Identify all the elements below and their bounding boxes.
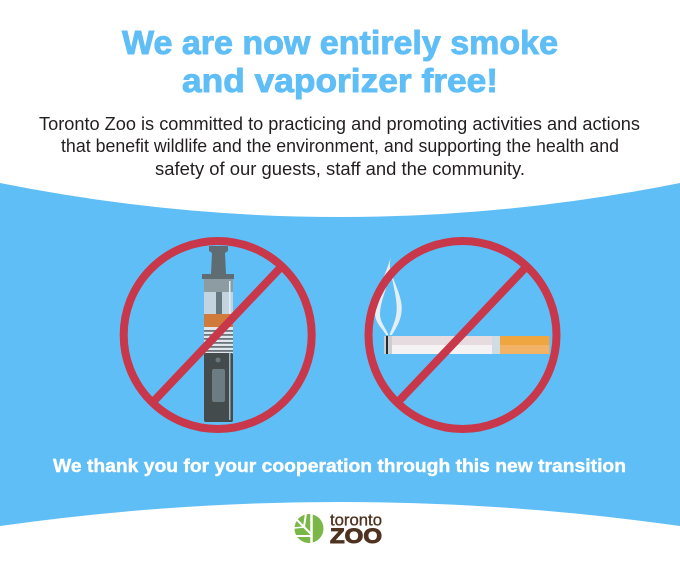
title xyxy=(122,24,558,99)
intro text block: safety of our guests, staff and the community. xyxy=(155,159,525,179)
intro text block: Toronto Zoo is committed to practicing and promoting activities and actions xyxy=(39,114,640,134)
intro text block xyxy=(39,114,640,179)
cigarette paper xyxy=(384,336,492,354)
logo leaf mark xyxy=(294,513,324,544)
cigarette band xyxy=(492,336,500,354)
smoke xyxy=(375,257,402,335)
vape mouthpiece xyxy=(209,246,228,274)
cigarette tip xyxy=(384,336,392,354)
vape orange band xyxy=(204,314,233,327)
blue curved band xyxy=(0,183,680,526)
vape battery body xyxy=(204,353,233,422)
title: and vaporizer free! xyxy=(182,62,498,99)
prohibition ring xyxy=(368,241,556,429)
icon: prohibited vaporizer xyxy=(124,241,312,429)
prohibition ring xyxy=(124,241,312,429)
cigarette filter xyxy=(500,336,550,354)
Toronto Zoo logo: ZOO xyxy=(330,524,382,548)
intro text block: that benefit wildlife and the environment, and supporting the health and xyxy=(61,136,619,156)
Toronto Zoo logo xyxy=(294,510,382,548)
icon: prohibited cigarette xyxy=(368,241,556,429)
logo wordmark: toronto xyxy=(330,510,382,530)
title: We are now entirely smoke xyxy=(122,24,558,61)
vape tank xyxy=(204,279,233,292)
thank you message: We thank you for your cooperation through this new transition xyxy=(53,455,626,476)
vape coil stripes xyxy=(204,327,233,353)
